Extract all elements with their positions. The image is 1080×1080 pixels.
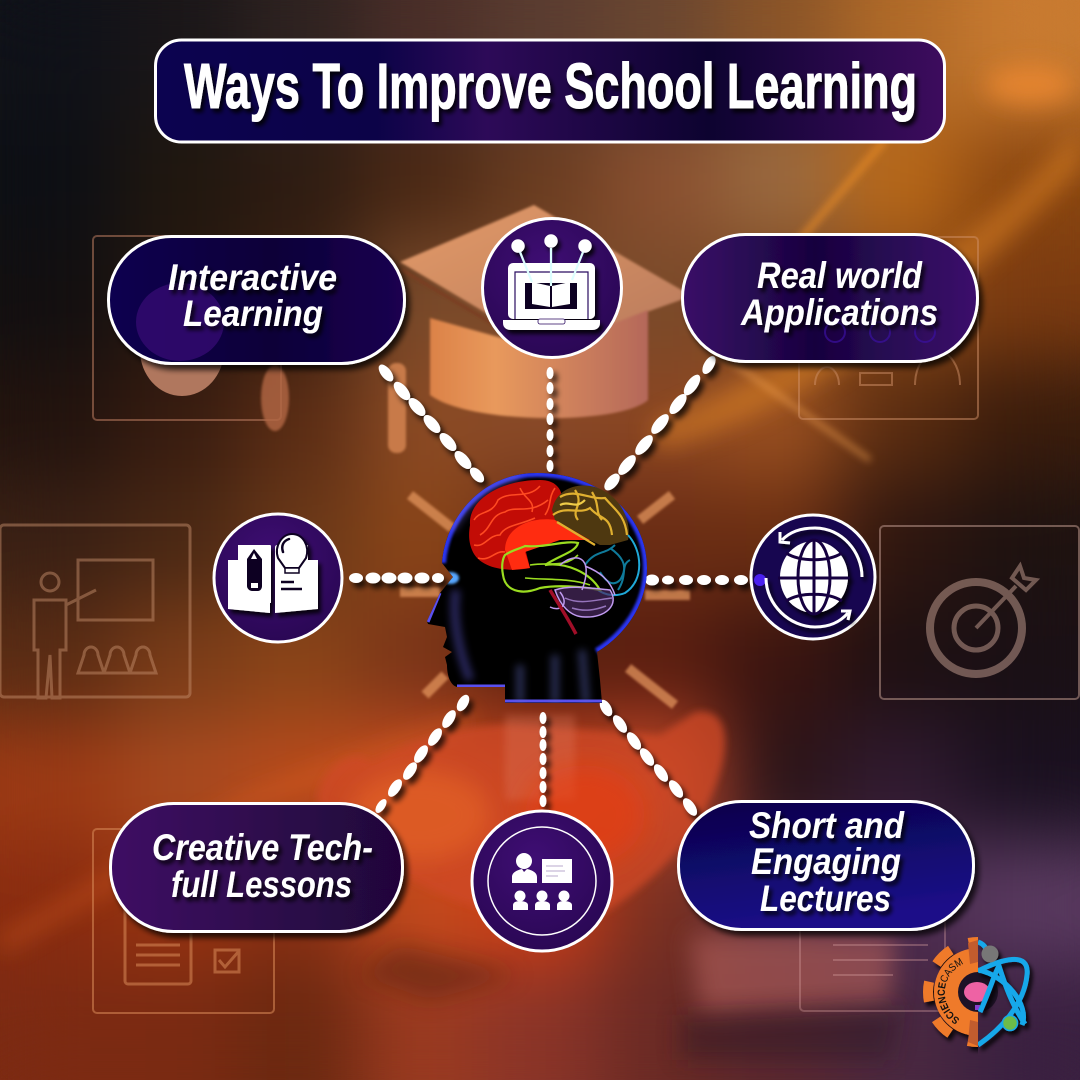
connector: short lectures dots xyxy=(597,698,700,818)
icon: teacher with students xyxy=(472,811,612,951)
background: teacher frame xyxy=(0,525,190,698)
connector: right icon dots xyxy=(645,574,748,586)
label text xyxy=(740,255,938,333)
background: graduation cap xyxy=(388,205,692,453)
brain: parietal lobe yellow xyxy=(552,486,629,545)
icon: book with pencil and light bulb xyxy=(214,514,342,642)
connector: interactive learning dots xyxy=(376,362,487,485)
background: document frame xyxy=(93,829,274,1013)
logo brain xyxy=(964,982,990,1010)
label text: Interactive xyxy=(168,257,337,298)
label text: Real world xyxy=(757,255,923,296)
background: mauve frame bottom right xyxy=(800,829,945,1011)
label text: Applications xyxy=(740,292,938,333)
brain: temporal lobe green xyxy=(502,542,600,592)
label text: full Lessons xyxy=(171,864,352,905)
logo atom xyxy=(978,942,1027,1045)
connector: left icon dots xyxy=(349,572,444,584)
brain: occipital lobe cyan xyxy=(585,535,639,595)
label text: Lectures xyxy=(760,878,891,919)
pill: Creative Tech-full Lessons xyxy=(110,804,402,932)
background: hand xyxy=(317,712,900,1060)
logo gear xyxy=(923,937,978,1053)
pill: Real world Applications xyxy=(682,234,978,362)
background: translucent frame top left xyxy=(93,236,289,431)
label text: Short and xyxy=(749,805,905,846)
label text: Learning xyxy=(183,293,323,334)
pill: Short and Engaging Lectures xyxy=(678,802,974,930)
icon: globe with arrows xyxy=(751,515,875,639)
label text: Engaging xyxy=(751,841,901,882)
label text xyxy=(168,257,337,334)
brain stem xyxy=(550,590,576,634)
label text xyxy=(152,827,373,905)
connector: bottom icon dots xyxy=(540,712,546,807)
label text xyxy=(749,805,905,919)
title banner xyxy=(156,40,944,142)
pill: Interactive Learning xyxy=(108,236,404,364)
central head with brain xyxy=(427,473,647,703)
logo: Sciencecasm gear and atom xyxy=(923,937,1035,1053)
connector: creative lessons dots xyxy=(373,693,472,815)
brain: frontal lobe red xyxy=(469,480,590,570)
background: target frame xyxy=(880,526,1079,699)
background: translucent frame top right xyxy=(799,237,978,419)
connector: top icon dots xyxy=(546,367,554,472)
brain: cerebellum purple xyxy=(550,558,615,617)
icon: laptop with book and nodes xyxy=(482,218,622,358)
logo wordmark: SCIENCECASM xyxy=(938,958,963,1024)
label text: Creative Tech- xyxy=(152,827,373,868)
head glow outline xyxy=(428,473,647,703)
background: glowing rays xyxy=(400,495,690,705)
connector: real world applications dots xyxy=(601,354,718,493)
